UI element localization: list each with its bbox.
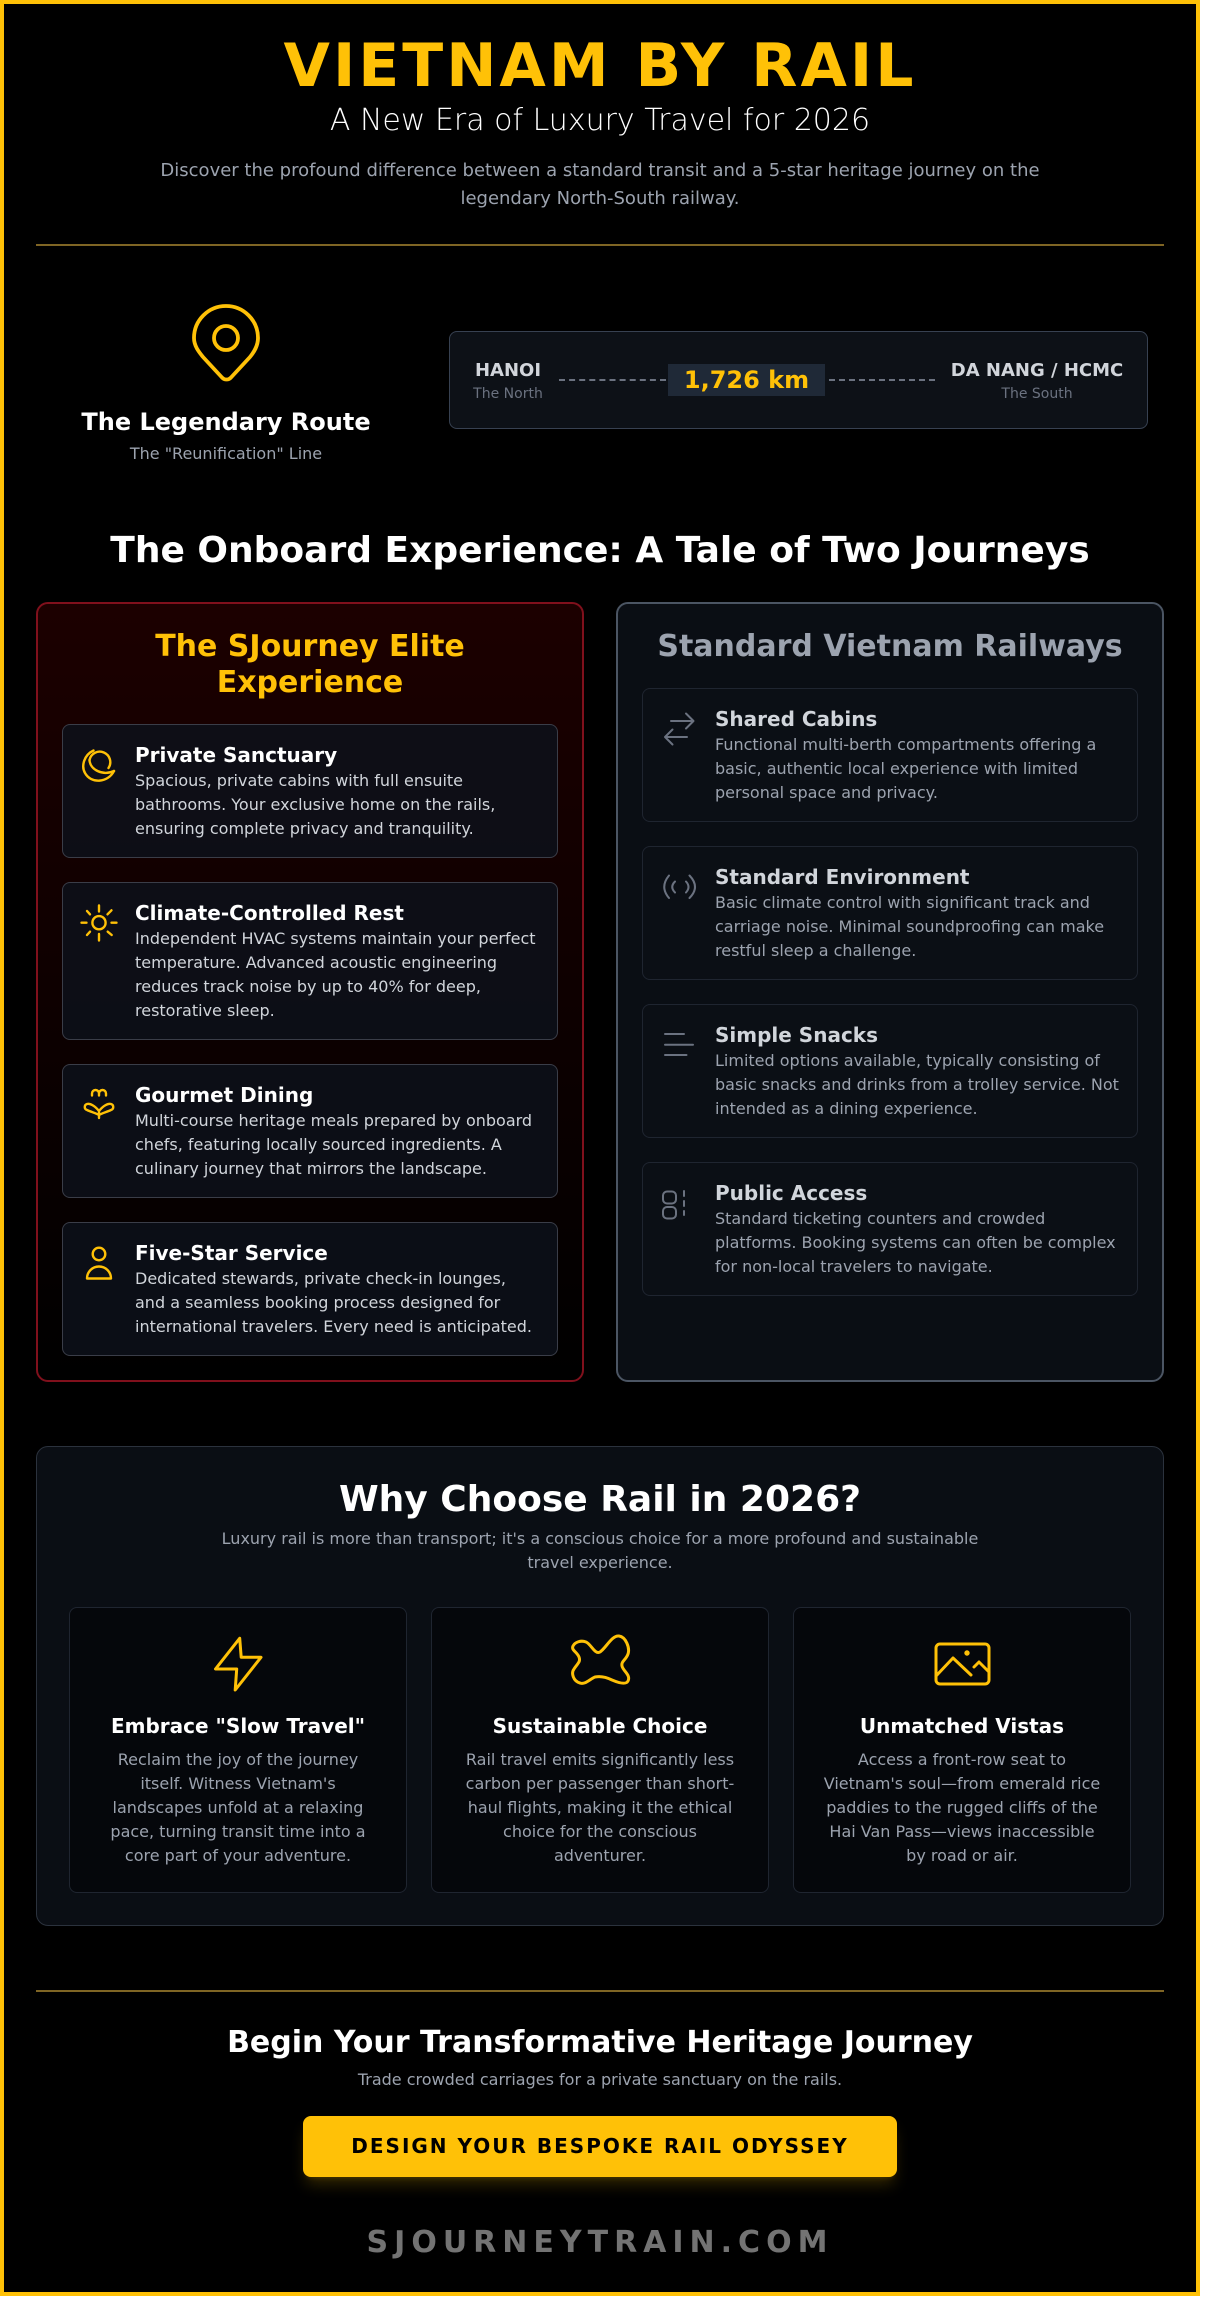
card title: Climate-Controlled Rest [135,901,404,925]
panel heading: Experience [217,664,403,700]
card text: Dedicated stewards, private check-in lounges, [135,1269,506,1288]
card title: Private Sanctuary [135,743,337,767]
origin region: The North [473,386,543,402]
dashed line left [559,379,666,381]
card text [715,735,1096,802]
card text: haul flights, making it the ethical [468,1798,732,1817]
card title: Sustainable Choice [493,1714,707,1738]
card title: Five-Star Service [135,1241,328,1265]
card title: Standard Environment [715,865,970,889]
destination city: DA NANG / HCMC [951,360,1123,381]
panel heading [155,628,465,700]
panel: SJourney Elite [36,602,584,1382]
icon: moon [82,749,116,782]
card text: Multi-course heritage meals prepared by onboard [135,1111,532,1130]
card text [715,893,1104,960]
card text: adventurer. [554,1846,646,1865]
card text: platforms. Booking systems can often be complex [715,1233,1116,1252]
icon: person [86,1246,112,1280]
card: sustainable [431,1607,769,1893]
card text: intended as a dining experience. [715,1099,978,1118]
card text [715,1209,1116,1276]
card title: Unmatched Vistas [860,1714,1064,1738]
card text: pace, turning transit time into a [110,1822,366,1841]
route subheading: The "Reunification" Line [130,444,322,463]
card text: and a seamless booking process designed for [135,1293,500,1312]
card: dining [62,1064,558,1198]
card text: international travelers. Every need is anticipated. [135,1317,532,1336]
dashed line right [829,379,935,381]
distance badge: 1,726 km [684,366,809,394]
card text: chefs, featuring locally sourced ingredients. A [135,1135,502,1154]
panel heading: The SJourney Elite [155,628,465,664]
card text: for non-local travelers to navigate. [715,1257,993,1276]
section heading: Why Choose Rail in 2026? [339,1479,861,1520]
panel heading: Standard Vietnam Railways [657,628,1123,664]
card text [466,1750,734,1865]
card text: reduces track noise by up to 40% for deep, [135,977,481,996]
card title: Gourmet Dining [135,1083,313,1107]
card: private sanctuary [62,724,558,858]
icon: arrows [664,712,694,746]
card text: Independent HVAC systems maintain your perfect [135,929,536,948]
button [303,2116,897,2177]
card: shared cabins [642,688,1138,822]
card text: restorative sleep. [135,1001,275,1020]
card: service [62,1222,558,1356]
card text: Functional multi-berth compartments offering a [715,735,1096,754]
card text: Hai Van Pass—views inaccessible [829,1822,1095,1841]
card text: core part of your adventure. [125,1846,351,1865]
route section: left label [81,304,371,463]
card text: Limited options available, typically consisting of [715,1051,1100,1070]
card text: landscapes unfold at a relaxing [113,1798,363,1817]
intro text: Discover the profound difference between a standard transit and a 5-star heritage journey on the [160,160,1040,181]
call to action heading: Begin Your Transformative Heritage Journey [227,2025,973,2060]
card text: restful sleep a challenge. [715,941,916,960]
origin city: HANOI [475,360,541,381]
card text: bathrooms. Your exclusive home on the rails, [135,795,495,814]
card text [135,929,536,1020]
card text: Vietnam's soul—from emerald rice [824,1774,1100,1793]
section text: Luxury rail is more than transport; it's a conscious choice for a more profound and sustainable [222,1529,978,1548]
card text: paddies to the rugged cliffs of the [826,1798,1098,1817]
card text [135,1269,532,1336]
panel: Standard Vietnam Railways [616,602,1164,1382]
icon: lines [664,1033,694,1056]
card text: by road or air. [906,1846,1018,1865]
card title: Embrace "Slow Travel" [111,1714,365,1738]
website footer: SJOURNEYTRAIN.COM [367,2225,833,2260]
section text: travel experience. [527,1553,673,1572]
icon: blob [571,1634,630,1685]
card text: Standard ticketing counters and crowded [715,1209,1045,1228]
card text: personal space and privacy. [715,783,938,802]
card text: Rail travel emits significantly less [466,1750,734,1769]
card: climate [62,882,558,1040]
distance badge [668,364,825,396]
card text [715,1051,1119,1118]
card: environment [642,846,1138,980]
icon: leaf [84,1088,114,1120]
title: VIETNAM BY RAIL [284,31,916,101]
card text: culinary journey that mirrors the landscape. [135,1159,487,1178]
card text: Reclaim the joy of the journey [118,1750,358,1769]
card text [135,771,495,838]
card text [135,1111,532,1178]
card text [110,1750,366,1865]
panel: why choose rail [36,1446,1164,1926]
card text: Basic climate control with significant track and [715,893,1090,912]
card text [824,1750,1100,1865]
icon: map pin [192,304,260,382]
icon: signal [663,874,696,899]
card text: basic snacks and drinks from a trolley service. Not [715,1075,1119,1094]
icon: booths [662,1190,685,1220]
card text: basic, authentic local experience with limited [715,759,1078,778]
card text: carriage noise. Minimal soundproofing can make [715,917,1104,936]
card title: Public Access [715,1181,867,1205]
card text: temperature. Advanced acoustic engineering [135,953,497,972]
card text: Access a front-row seat to [858,1750,1066,1769]
icon: bolt [214,1636,263,1692]
icon: sun [80,904,118,942]
destination region: The South [1001,386,1073,402]
intro text [160,160,1040,209]
card title: Simple Snacks [715,1023,878,1047]
section heading: The Onboard Experience: A Tale of Two Journeys [110,530,1090,571]
card text: carbon per passenger than short- [466,1774,734,1793]
intro text: legendary North-South railway. [460,188,740,209]
card text: Spacious, private cabins with full ensuite [135,771,463,790]
card text: choice for the conscious [503,1822,697,1841]
card: public access [642,1162,1138,1296]
card: snacks [642,1004,1138,1138]
section text [222,1529,978,1572]
icon: image [934,1642,991,1686]
subtitle: A New Era of Luxury Travel for 2026 [330,103,870,138]
card text: ensuring complete privacy and tranquility. [135,819,474,838]
button: DESIGN YOUR BESPOKE RAIL ODYSSEY [351,2134,849,2158]
card: slow travel [69,1607,407,1893]
card: vistas [793,1607,1131,1893]
card text: itself. Witness Vietnam's [140,1774,336,1793]
call to action text: Trade crowded carriages for a private sanctuary on the rails. [358,2070,842,2089]
route heading: The Legendary Route [81,408,371,436]
card title: Shared Cabins [715,707,877,731]
route bar [449,331,1148,429]
